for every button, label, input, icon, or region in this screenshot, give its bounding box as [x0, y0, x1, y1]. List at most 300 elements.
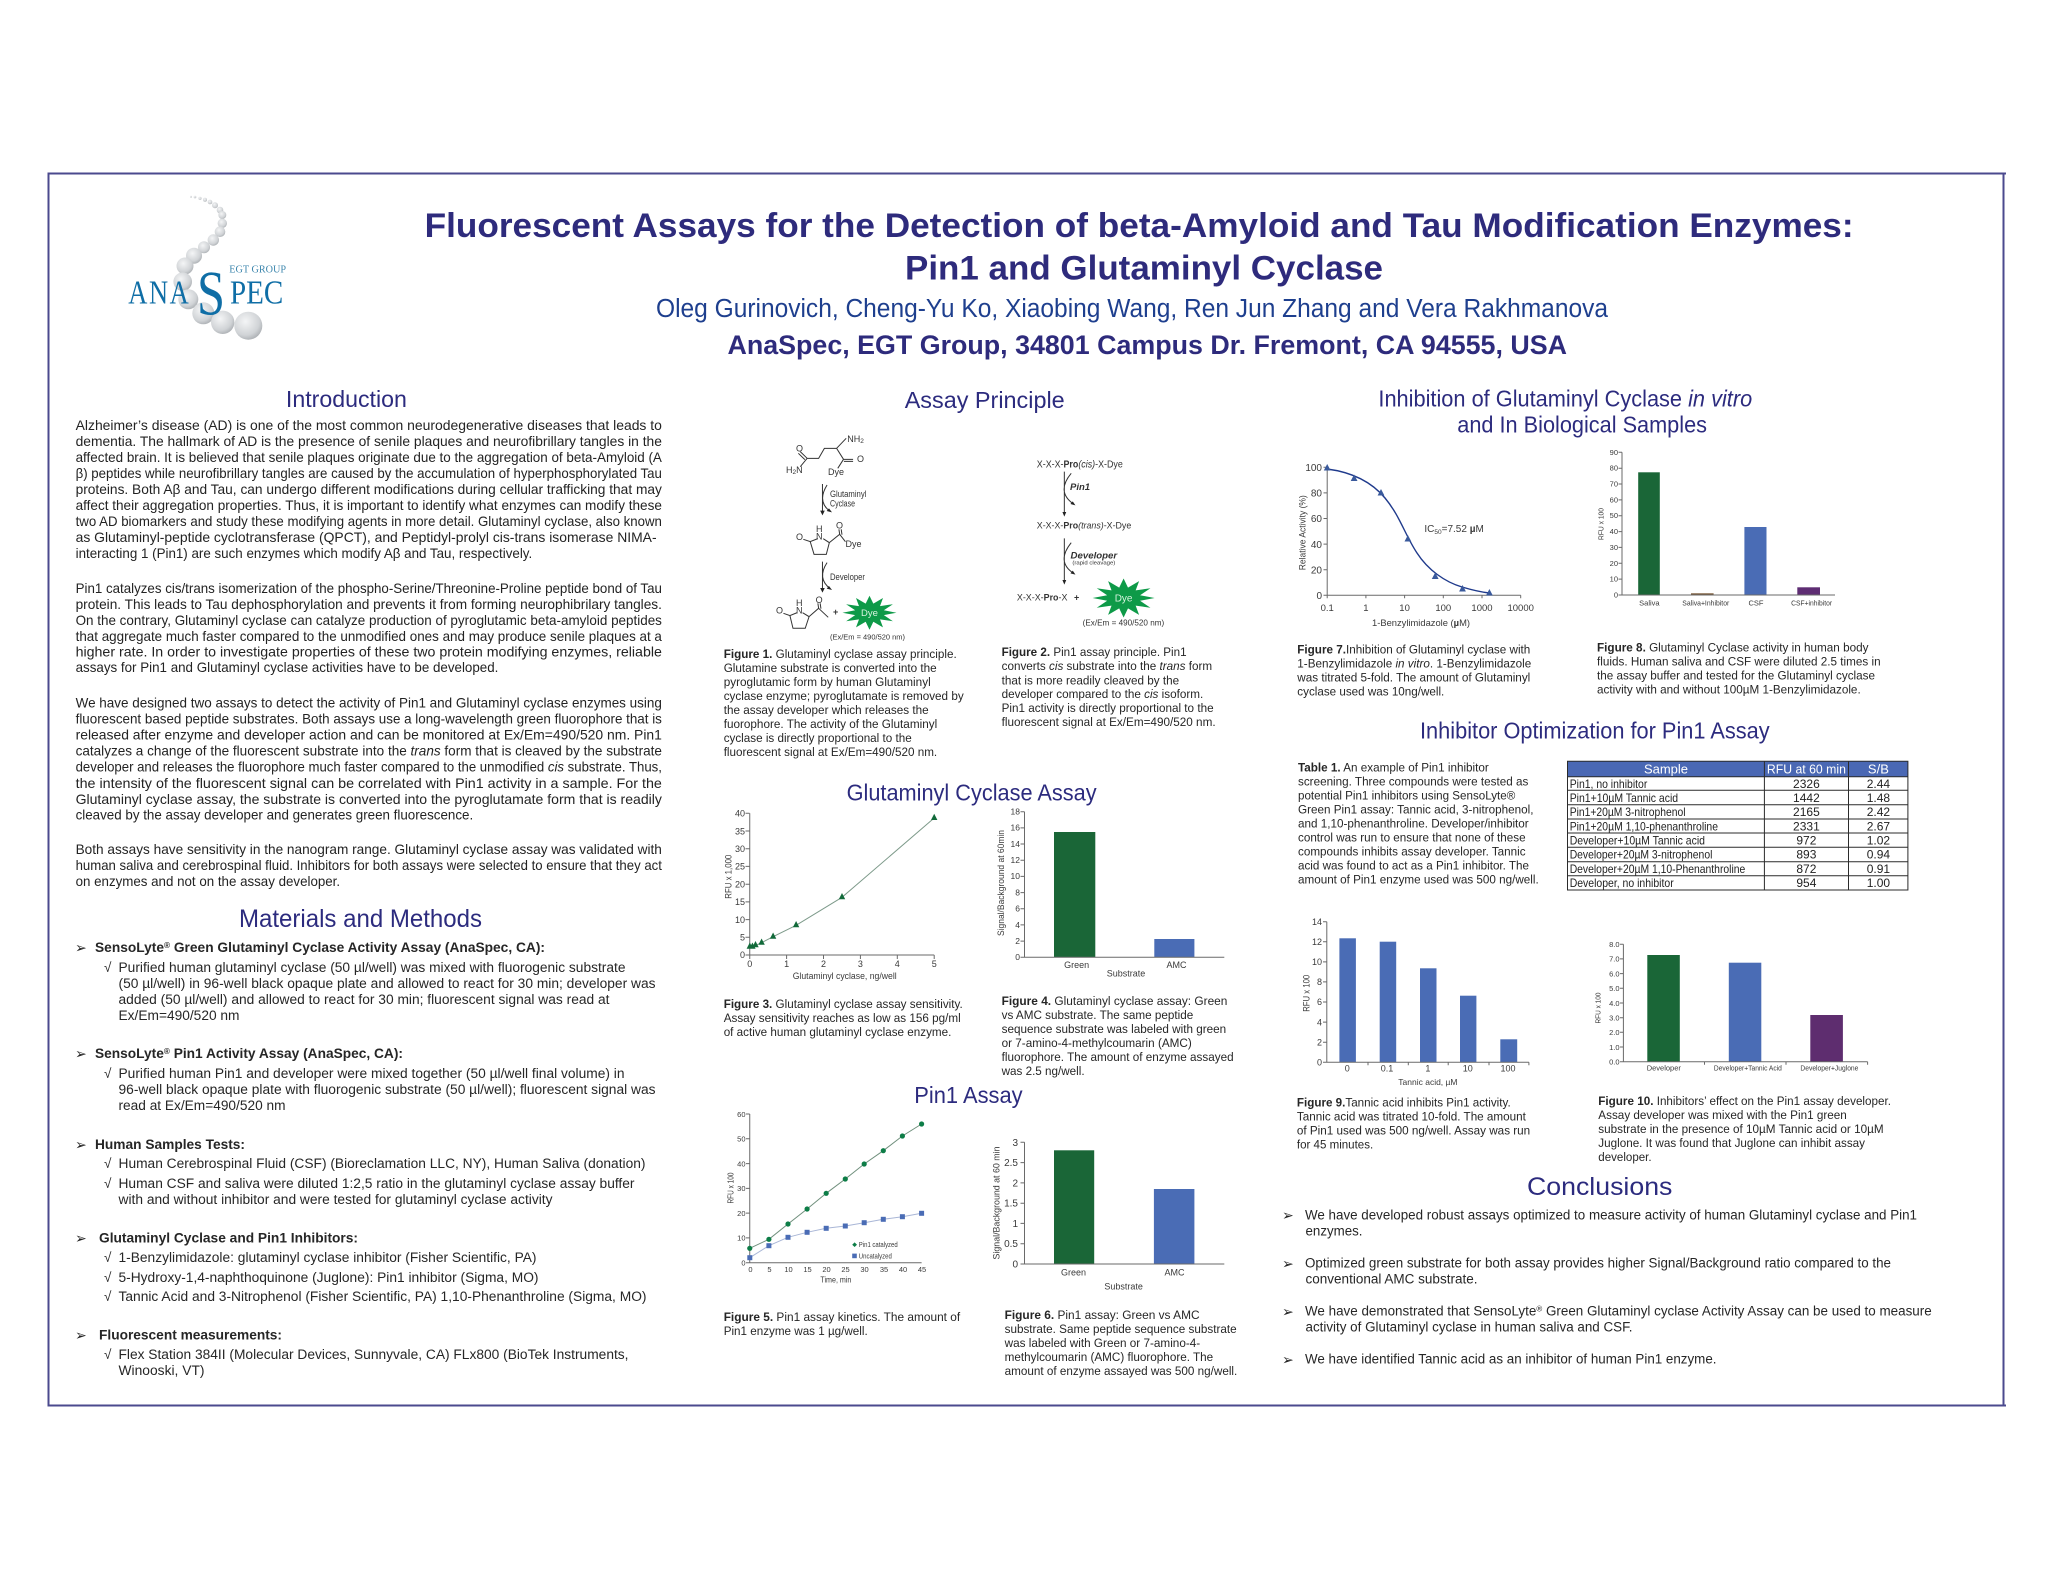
line chart: figure 3: RFU x 1,000: [724, 855, 734, 899]
bar chart: figure 4: Green: [1064, 960, 1089, 970]
table: inhibitor screening: Pin1+10µM Tannic acid: [1570, 791, 1678, 805]
caption: figure 5: [724, 1310, 961, 1338]
method: human samples: with and without inhibitor and were tested for glutaminyl cyclase activity: [117, 1192, 553, 1207]
line chart: figure 5: 10: [737, 1234, 746, 1243]
bar chart: figure 8: Saliva: [1639, 598, 1660, 607]
table: inhibitor screening: 1.00: [1867, 876, 1890, 890]
method: glutaminyl cyclase assay: ➢: [75, 940, 87, 956]
diagram: Pin1 scheme: Developer: [1070, 550, 1118, 560]
caption: figure 2: developer compared to the cis isoform.: [1002, 687, 1203, 701]
line chart: figure 3: 1: [784, 959, 789, 969]
bar chart: figure 8: CSF+inhibitor: [1791, 598, 1833, 607]
bar chart: figure 8: RFU x 100: [1596, 508, 1606, 540]
method: fluorescent measurements: Winooski, VT): [118, 1363, 204, 1378]
icon: bead chain: [173, 196, 262, 340]
dose-response chart: figure 7: 0.1: [1321, 603, 1334, 614]
bar chart: figure 6: AMC: [1164, 1267, 1185, 1277]
caption: table 1: [1298, 761, 1539, 887]
line chart: figure 5: Time, min: [820, 1275, 852, 1285]
dose-response chart: figure 7: 1000: [1471, 603, 1493, 614]
caption: figure 10: substrate in the presence of 10µM Tannic acid or 10µM: [1598, 1122, 1884, 1136]
method: Pin1 assay: √: [104, 1066, 112, 1081]
method: human samples: Human Cerebrospinal Fluid (CSF) (Bioreclamation LLC, NY), Human Saliva (donation): [118, 1156, 646, 1171]
text block: intro paragraph 3: [76, 696, 662, 823]
caption: figure 4: [1001, 994, 1234, 1078]
caption: table 1: and 1,10-phenanthroline. Developer/inhibitor: [1298, 817, 1529, 831]
bar chart: figure 10: 0.0: [1609, 1058, 1620, 1066]
diagram: glutaminyl cyclase scheme: H: [796, 598, 802, 608]
bar chart: figure 8: 70: [1610, 480, 1618, 488]
bar chart: figure 9: [1302, 917, 1529, 1087]
table: inhibitor screening: 872: [1796, 862, 1817, 876]
bar chart: figure 10: [1594, 940, 1868, 1073]
conclusion 2: ➢: [1282, 1256, 1294, 1272]
bar chart: figure 6: 1.5: [1004, 1199, 1018, 1210]
line chart: figure 5: 60: [737, 1110, 746, 1119]
table: inhibitor screening: 2326: [1793, 777, 1820, 791]
caption: figure 10: developer.: [1598, 1150, 1652, 1164]
diagram: glutaminyl cyclase scheme: Developer: [830, 572, 865, 582]
diagram: glutaminyl cyclase scheme: (Ex/Em = 490/520 nm): [830, 632, 905, 641]
caption: table 1: amount of Pin1 enzyme used was 500 ng/well.: [1298, 873, 1539, 887]
text block: intro paragraph 1: affected brain. It is believed that senile plaques originate due to the aggregation of beta-Amyloid (A: [76, 450, 663, 465]
diagram: Pin1 scheme: X-X-X-Pro(trans)-X-Dye: [1037, 520, 1131, 530]
line chart: figure 3: 30: [735, 844, 745, 854]
text block: intro paragraph 3: released after enzyme and developer action and can be monitored at Ex/Em=490/520 nm. Pin1: [76, 728, 662, 742]
caption: figure 7: [1296, 642, 1531, 698]
line chart: figure 3: 0: [740, 950, 745, 960]
caption: figure 4: fluorophore. The amount of enzyme assayed: [1002, 1050, 1234, 1064]
bar chart: figure 9: 4: [1317, 1017, 1322, 1027]
caption: figure 8: the assay buffer and tested for the Glutaminyl cyclase: [1597, 669, 1875, 683]
heading: Assay Principle: Assay Principle: [905, 387, 1065, 413]
bar chart: figure 8: CSF: [1748, 598, 1764, 607]
bar chart: figure 10: 7.0: [1609, 955, 1620, 964]
table: inhibitor screening: [1568, 761, 1908, 890]
caption: figure 2: fluorescent signal at Ex/Em=490/520 nm.: [1002, 715, 1216, 729]
text block: intro paragraph 1: as Glutaminyl-peptide cyclotransferase (QPCT), and Peptidyl-prolyl cis-trans isomerase NIMA-: [76, 530, 657, 545]
caption: figure 5: Figure 5. Pin1 assay kinetics. The amount of: [724, 1310, 961, 1324]
method: glutaminyl cyclase assay: SensoLyte: [95, 940, 163, 955]
legend: [852, 1240, 898, 1260]
text block: intro paragraph 2: Pin1 catalyzes cis/trans isomerization of the phospho-Serine/Threonine-Proline peptide bond of Tau: [76, 581, 662, 596]
caption: figure 7: 1-Benzylimidazole in vitro. 1-Benzylimidazole: [1297, 656, 1531, 670]
text block: intro paragraph 2: assays for Pin1 and Glutaminyl cyclase activities have to be developed.: [76, 660, 498, 675]
title: [425, 207, 1854, 288]
text block: intro paragraph 2: [76, 581, 662, 675]
line chart: figure 3: 15: [735, 897, 745, 907]
table: inhibitor screening: Developer+20µM 3-nitrophenol: [1570, 848, 1712, 862]
bar chart: figure 9: 100: [1500, 1064, 1516, 1074]
caption: figure 3: Figure 3. Glutaminyl cyclase assay sensitivity.: [724, 997, 963, 1011]
caption: table 1: control was run to ensure that none of these: [1298, 831, 1526, 845]
method: fluorescent measurements: ➢: [75, 1328, 87, 1344]
title: Pin1 and Glutaminyl Cyclase: [905, 250, 1383, 288]
line chart: figure 5: 20: [822, 1265, 831, 1274]
bar chart: figure 9: 0: [1317, 1058, 1322, 1068]
heading: Inhibition of Glutaminyl Cyclase: [1378, 386, 1752, 438]
line chart: figure 3: [724, 809, 937, 981]
line chart: figure 3: 5: [932, 959, 937, 969]
table: inhibitor screening: 1.02: [1867, 834, 1890, 848]
bar chart: figure 9: RFU x 100: [1302, 975, 1312, 1012]
diagram: glutaminyl cyclase scheme: Glutaminyl: [830, 489, 866, 499]
bar chart: figure 4: 16: [1011, 822, 1020, 832]
dose-response chart: figure 7: Relative Activity (%): [1298, 495, 1308, 570]
table: inhibitor screening: 1.48: [1867, 791, 1890, 805]
bar chart: figure 8: Saliva+Inhibitor: [1682, 598, 1730, 607]
dose-response chart: figure 7: 60: [1311, 514, 1322, 525]
bar chart: figure 6: 3: [1012, 1138, 1018, 1149]
bar chart: figure 10: 8.0: [1609, 940, 1620, 949]
bar chart: figure 4: 4: [1015, 920, 1020, 930]
conclusion 1: ➢: [1282, 1208, 1294, 1224]
table: inhibitor screening: 1442: [1793, 791, 1820, 805]
diagram: glutaminyl cyclase scheme: 2: [792, 469, 796, 476]
heading: Inhibitor Optimization: Inhibitor Optimization for Pin1 Assay: [1420, 717, 1770, 743]
caption: figure 6: methylcoumarin (AMC) fluorophore. The: [1005, 1350, 1213, 1364]
caption: figure 9: Figure 9.Tannic acid inhibits Pin1 activity.: [1297, 1096, 1511, 1110]
dose-response chart: figure 7: 10: [1399, 603, 1410, 614]
bar chart: figure 10: 1.0: [1609, 1043, 1620, 1052]
method: Pin1 assay: ®: [164, 1047, 170, 1056]
bar chart: figure 8: 30: [1610, 543, 1618, 552]
diagram: glutaminyl cyclase scheme: O: [776, 606, 783, 616]
caption: table 1: Green Pin1 assay: Tannic acid, 3-nitrophenol,: [1298, 803, 1534, 817]
bar chart: figure 10: 3.0: [1609, 1014, 1620, 1022]
method: human samples: Human CSF and saliva were diluted 1:2,5 ratio in the glutaminyl cyclase assay buffer: [118, 1176, 635, 1191]
conclusion 2: [1282, 1256, 1891, 1287]
caption: figure 2: [1002, 645, 1216, 729]
bar chart: figure 8: 60: [1610, 495, 1618, 504]
bar chart: figure 9: 1: [1425, 1064, 1430, 1074]
text block: intro paragraph 4: on enzymes and not on the assay developer.: [76, 874, 340, 889]
table: inhibitor screening: Pin1, no inhibitor: [1570, 777, 1647, 791]
method: fluorescent measurements: [75, 1328, 628, 1378]
dose-response chart: figure 7: IC: [1424, 524, 1434, 535]
bar chart: figure 9: 10: [1312, 957, 1322, 967]
text block: intro paragraph 2: that aggregate much faster compared to the unmodified ones and may produce senile plaques at a: [76, 629, 662, 644]
bar chart: figure 10: 6.0: [1609, 969, 1620, 978]
method: glutaminyl cyclase assay: Ex/Em=490/520 nm: [118, 1008, 240, 1023]
line chart: figure 5: 5: [767, 1265, 772, 1274]
conclusion 3: We have demonstrated that SensoLyte: [1305, 1304, 1538, 1319]
line chart: figure 3: 10: [735, 915, 745, 925]
conclusion 2: conventional AMC substrate.: [1306, 1272, 1478, 1287]
method: Pin1 assay: SensoLyte: [95, 1046, 163, 1061]
text block: intro paragraph 2: protein. This leads to Tau dephosphorylation and prevents it from forming neurophibrilary tangles.: [76, 597, 662, 612]
bar chart: figure 9: 2: [1317, 1037, 1322, 1047]
line chart: figure 3: 2: [821, 959, 826, 969]
heading: Inhibition of Glutaminyl Cyclase: and In Biological Samples: [1457, 412, 1707, 438]
text block: intro paragraph 3: cleaved by the assay developer and generates green fluorescence.: [76, 808, 473, 823]
caption: figure 1: fuorophore. The activity of the Glutaminyl: [724, 717, 937, 731]
table: inhibitor screening: 893: [1796, 848, 1817, 862]
caption: figure 2: Figure 2. Pin1 assay principle. Pin1: [1002, 645, 1187, 659]
line chart: figure 5: 45: [918, 1265, 926, 1274]
panel: Pin1 assay: [724, 1082, 1237, 1378]
bar chart: figure 10: RFU x 100: [1594, 992, 1602, 1024]
panel: introduction: [76, 386, 663, 889]
text block: intro paragraph 3: fluorescent based peptide substrates. Both assays use a long-wavelength green fluorophore that is: [76, 712, 662, 727]
table: inhibitor screening: 0.91: [1867, 862, 1890, 876]
bar chart: figure 4: 6: [1015, 904, 1020, 914]
text block: intro paragraph 3: Glutaminyl cyclase assay, the substrate is converted into the pyroglutamate form that is readily: [76, 792, 662, 807]
dose-response chart: figure 7: 1: [1363, 603, 1369, 614]
method: Pin1 assay: Purified human Pin1 and developer were mixed together (50 µl/well final volume) in: [118, 1066, 624, 1081]
method: glutaminyl cyclase assay: Purified human glutaminyl cyclase (50 µl/well) was mixed with fluorogenic substrate: [118, 960, 626, 975]
conclusion 1: [1282, 1207, 1917, 1239]
bar chart: figure 4: 18: [1011, 806, 1020, 816]
caption: figure 2: that is more readily cleaved by the: [1002, 673, 1179, 687]
bar chart: figure 8: 10: [1610, 575, 1618, 584]
line chart: figure 5: 0: [748, 1265, 753, 1274]
table: inhibitor screening: Pin1+20µM 3-nitrophenol: [1570, 805, 1686, 819]
text block: intro paragraph 1: interacting 1 (Pin1) are such enzymes which modify Aβ and Tau, respectively.: [76, 546, 532, 561]
table: inhibitor screening: RFU at 60 min: [1767, 762, 1846, 777]
method: human samples: √: [104, 1176, 112, 1191]
bar chart: figure 4: Signal/Background at 60min: [996, 830, 1006, 936]
caption: figure 10: Juglone. It was found that Juglone can inhibit assay: [1598, 1136, 1866, 1150]
table: inhibitor screening: 2165: [1793, 805, 1820, 819]
text block: intro paragraph 1: affect their aggregation properties. Thus, it is important to identify what enzymes can modify these: [76, 498, 662, 513]
caption: figure 8: [1597, 641, 1881, 697]
line chart: figure 3: 20: [735, 880, 745, 890]
line chart: figure 5: 40: [737, 1159, 746, 1168]
bar chart: figure 8: 90: [1610, 448, 1618, 457]
caption: figure 10: Assay developer was mixed with the Pin1 green: [1598, 1108, 1847, 1122]
text block: intro paragraph 1: two AD biomarkers and study these modifying agents in more detail. Glutaminyl cyclase, also known: [76, 514, 662, 529]
bar chart: figure 10: Developer+Tannic Acid: [1714, 1064, 1782, 1073]
conclusion 4: We have identified Tannic acid as an inhibitor of human Pin1 enzyme.: [1305, 1352, 1716, 1367]
caption: figure 1: Figure 1. Glutaminyl cyclase assay principle.: [724, 647, 957, 661]
table: inhibitor screening: Pin1+20µM 1,10-phenanthroline: [1570, 819, 1718, 833]
caption: figure 9: Tannic acid was titrated 10-fold. The amount: [1297, 1110, 1526, 1124]
line chart: figure 5: [726, 1110, 926, 1285]
diagram: glutaminyl cyclase scheme: Cyclase: [830, 499, 855, 509]
table: inhibitor screening: 2331: [1793, 819, 1820, 833]
bar chart: figure 10: 4.0: [1609, 999, 1620, 1008]
bar chart: figure 9: Tannic acid, µM: [1398, 1077, 1458, 1087]
method: Pin1 assay: 96-well black opaque plate with fluorogenic substrate (50 µl/well); fluorescent signal was: [118, 1082, 656, 1097]
text block: intro paragraph 2: higher rate. In order to investigate properties of these two protein modifying enzymes, reliable: [76, 644, 662, 659]
heading: Materials and Methods: Materials and Methods: [239, 905, 482, 933]
conclusion 2: Optimized green substrate for both assay provides higher Signal/Background ratio compared to the: [1305, 1256, 1891, 1271]
caption: figure 10: Figure 10. Inhibitors’ effect on the Pin1 assay developer.: [1598, 1094, 1891, 1108]
logo: AnaSpec: [128, 196, 286, 340]
bar chart: figure 8: 20: [1610, 559, 1618, 568]
bar chart: figure 8: 40: [1610, 527, 1618, 536]
caption: figure 2: Pin1 activity is directly proportional to the: [1002, 701, 1214, 715]
caption: figure 2: converts cis substrate into the trans form: [1002, 659, 1212, 673]
diagram: glutaminyl cyclase scheme: 2: [860, 438, 864, 445]
heading: Inhibition of Glutaminyl Cyclase: Inhibition of Glutaminyl Cyclase in vitro: [1378, 386, 1752, 412]
caption: figure 6: amount of enzyme assayed was 500 ng/well.: [1005, 1364, 1237, 1378]
logo wordmark: EGT GROUP: [229, 265, 286, 276]
diagram: glutaminyl cyclase scheme: +: [833, 607, 838, 617]
dose-response chart: figure 7: 20: [1311, 565, 1322, 576]
line chart: figure 5: 30: [860, 1265, 869, 1274]
method: inhibitors: √: [104, 1289, 112, 1304]
diagram: Pin1 scheme: Pin1: [1070, 482, 1090, 492]
caption: figure 1: Glutamine substrate is converted into the: [724, 661, 937, 675]
bar chart: figure 4: 2: [1015, 936, 1020, 946]
caption: figure 9: [1297, 1096, 1530, 1152]
line chart: figure 5: 35: [880, 1265, 888, 1274]
caption: figure 6: was labeled with Green or 7-amino-4-: [1004, 1336, 1200, 1350]
diagram: glutaminyl cyclase scheme: O: [796, 532, 803, 542]
heading: Introduction: Introduction: [286, 386, 407, 412]
line chart: figure 3: 35: [735, 826, 745, 836]
text block: intro paragraph 4: human saliva and cerebrospinal fluid. Inhibitors for both assays were selected to ensure that they act: [76, 858, 662, 873]
method: glutaminyl cyclase assay: ®: [164, 941, 170, 950]
method: glutaminyl cyclase assay: added (50 µl/well) and allowed to react for 30 min; fluorescent signal was read at: [118, 992, 610, 1007]
diagram: Pin1 scheme: [1017, 459, 1165, 627]
diagram: glutaminyl cyclase scheme: O: [816, 595, 823, 605]
line chart: figure 5: 40: [899, 1265, 907, 1274]
bar chart: figure 4: 12: [1011, 855, 1020, 865]
caption: figure 7: cyclase used was 10ng/well.: [1297, 684, 1444, 698]
text block: intro paragraph 3: We have designed two assays to detect the activity of Pin1 and Glutaminyl cyclase enzymes using: [76, 696, 662, 711]
line chart: figure 3: 40: [735, 809, 745, 819]
method: human samples: ➢: [75, 1138, 87, 1154]
method: inhibitors: √: [104, 1250, 112, 1265]
line chart: figure 5: RFU x 100: [726, 1172, 736, 1204]
bar chart: figure 4: [996, 806, 1224, 979]
bar chart: figure 6: 0.5: [1004, 1239, 1018, 1250]
bar chart: figure 6: Green: [1061, 1267, 1086, 1277]
diagram: Pin1 scheme: +: [1074, 593, 1079, 603]
caption: figure 8: fluids. Human saliva and CSF were diluted 2.5 times in: [1597, 655, 1881, 669]
text block: intro paragraph 1: dementia. The hallmark of AD is the presence of senile plaques and neurofibrillary tangles in the: [76, 434, 662, 449]
text block: intro paragraph 1: Alzheimer’s disease (AD) is one of the most common neurodegenerative diseases that leads to: [76, 418, 662, 433]
method: inhibitors: 5-Hydroxy-1,4-naphthoquinone (Juglone): Pin1 inhibitor (Sigma, MO): [118, 1270, 538, 1285]
method: inhibitors: ➢: [75, 1231, 87, 1247]
caption: figure 6: [1004, 1308, 1237, 1378]
line chart: figure 3: 25: [735, 862, 745, 872]
diagram: glutaminyl cyclase scheme: H: [816, 524, 822, 534]
caption: figure 4: vs AMC substrate. The same peptide: [1002, 1008, 1193, 1022]
caption: figure 5: Pin1 enzyme was 1 µg/well.: [724, 1324, 868, 1338]
table: inhibitor screening: 2.44: [1867, 777, 1890, 791]
conclusion 1: enzymes.: [1306, 1224, 1362, 1239]
text block: intro paragraph 1: β) peptides while neurofibrillary tangles are caused by the accumulation of hyperphosphorylated Tau: [76, 466, 662, 481]
caption: figure 8: activity with and without 100µM 1-Benzylimidazole.: [1597, 683, 1861, 697]
method: Pin1 assay: read at Ex/Em=490/520 nm: [118, 1098, 286, 1113]
caption: table 1: screening. Three compounds were tested as: [1298, 775, 1528, 789]
table: inhibitor screening: 954: [1796, 876, 1817, 890]
table: inhibitor screening: Sample: [1644, 762, 1688, 777]
conclusion 3: Green Glutaminyl cyclase Activity Assay can be used to measure: [1542, 1304, 1932, 1319]
bar chart: figure 8: [1596, 448, 1835, 607]
bar chart: figure 10: 5.0: [1609, 984, 1620, 993]
line chart: figure 3: 0: [747, 959, 752, 969]
caption: table 1: acid was found to act as a Pin1 inhibitor. The: [1298, 859, 1529, 873]
bar chart: figure 9: 14: [1312, 917, 1322, 927]
table: inhibitor screening: 2.67: [1867, 819, 1890, 833]
logo wordmark: S: [197, 259, 225, 329]
conclusion 3: [1282, 1304, 1932, 1335]
icon: green dye burst: [1093, 578, 1155, 618]
dose-response chart: figure 7: [1298, 463, 1534, 629]
bar chart: figure 4: 14: [1011, 839, 1020, 849]
bar chart: figure 9: 6: [1317, 997, 1322, 1007]
dose-response chart: figure 7: =7.52: [1442, 524, 1470, 535]
caption: figure 1: the assay developer which releases the: [724, 703, 929, 717]
diagram: glutaminyl cyclase scheme: O: [857, 454, 864, 464]
diagram: glutaminyl cyclase scheme: NH: [847, 434, 860, 444]
panel: inhibitor optimization: [1297, 717, 1908, 1164]
method: Pin1 assay: Pin1 Activity Assay (AnaSpec, CA):: [170, 1046, 403, 1061]
bar chart: figure 6: Substrate: [1104, 1281, 1143, 1291]
bar chart: figure 4: 0: [1015, 952, 1020, 962]
caption: figure 4: was 2.5 ng/well.: [1001, 1064, 1085, 1078]
diagram: Pin1 scheme: (Ex/Em = 490/520 nm): [1083, 618, 1165, 627]
bar chart: figure 9: 0: [1345, 1064, 1350, 1074]
caption: figure 6: Figure 6. Pin1 assay: Green vs AMC: [1005, 1308, 1200, 1322]
caption: figure 9: for 45 minutes.: [1297, 1138, 1373, 1152]
authors: Oleg Gurinovich, Cheng-Yu Ko, Xiaobing Wang, Ren Jun Zhang and Vera Rakhmanova: [656, 295, 1609, 323]
text block: intro paragraph 4: [76, 842, 662, 889]
diagram: glutaminyl cyclase scheme: N: [796, 465, 803, 475]
poster frame: [48, 174, 2006, 1406]
diagram: glutaminyl cyclase scheme: H: [786, 465, 792, 475]
method: Pin1 assay: [75, 1046, 656, 1113]
caption: figure 1: cyclase is directly proportional to the: [724, 731, 912, 745]
method: human samples: [75, 1137, 646, 1207]
line chart: figure 5: 20: [737, 1209, 746, 1218]
line chart: figure 3: 4: [895, 959, 900, 969]
method: glutaminyl cyclase assay: (50 µl/well) in 96-well black opaque plate and allowed to react for 30 min; developer was: [118, 976, 656, 991]
method: glutaminyl cyclase assay: Green Glutaminyl Cyclase Activity Assay (AnaSpec, CA):: [170, 940, 545, 955]
method: inhibitors: Tannic Acid and 3-Nitrophenol (Fisher Scientific, PA) 1,10-Phenanthroline (Sigma, MO): [118, 1289, 646, 1304]
line chart: figure 5: 15: [803, 1265, 812, 1274]
caption: figure 4: Figure 4. Glutaminyl cyclase assay: Green: [1002, 994, 1228, 1008]
bar chart: figure 4: 10: [1011, 871, 1020, 881]
bar chart: figure 6: 2: [1012, 1178, 1018, 1189]
dose-response chart: figure 7: 1-Benzylimidazole (µM): [1372, 618, 1470, 629]
bar chart: figure 9: 8: [1317, 977, 1322, 987]
line chart: figure 3: 3: [858, 959, 863, 969]
conclusion 3: activity of Glutaminyl cyclase in human saliva and CSF.: [1306, 1320, 1632, 1335]
diagram: Pin1 scheme: X-X-X-Pro(cis)-X-Dye: [1037, 459, 1123, 470]
method: inhibitors: √: [104, 1270, 112, 1285]
text block: intro paragraph 2: On the contrary, Glutaminyl cyclase can catalyze production of pyroglutamic beta-amyloid peptides: [76, 613, 662, 628]
bar chart: figure 4: 8: [1015, 888, 1020, 898]
bar chart: figure 6: 1: [1012, 1219, 1018, 1230]
table: inhibitor screening: 2.42: [1867, 805, 1890, 819]
text block: intro paragraph 3: developer and releases the fluorophore much faster compared to the unmodified cis substrate. Thus,: [76, 760, 662, 774]
diagram: glutaminyl cyclase scheme: O: [836, 521, 843, 531]
conclusion 3: ®: [1536, 1305, 1542, 1314]
caption: figure 1: fluorescent signal at Ex/Em=490/520 nm.: [724, 745, 937, 759]
dose-response chart: figure 7: µM: [1470, 524, 1484, 535]
line chart: figure 3: 5: [740, 933, 745, 943]
dose-response chart: figure 7: 50: [1434, 529, 1442, 536]
dose-response chart: figure 7: 100: [1435, 603, 1451, 614]
diagram: glutaminyl cyclase scheme: Dye: [828, 467, 844, 477]
bar chart: figure 6: [992, 1138, 1224, 1291]
table: inhibitor screening: 972: [1796, 834, 1817, 848]
logo wordmark: ANA: [128, 274, 190, 311]
bar chart: figure 9: 0.1: [1381, 1064, 1393, 1074]
conclusion 4: ➢: [1282, 1352, 1294, 1368]
caption: figure 3: [724, 997, 963, 1039]
dose-response chart: figure 7: 10000: [1507, 603, 1534, 614]
text block: intro paragraph 3: catalyzes a change of the fluorescent substrate into the trans form that is cleaved by the substrate: [76, 743, 662, 758]
caption: figure 9: of Pin1 used was 500 ng/well. Assay was run: [1297, 1124, 1530, 1138]
line chart: figure 5: 30: [737, 1184, 746, 1193]
